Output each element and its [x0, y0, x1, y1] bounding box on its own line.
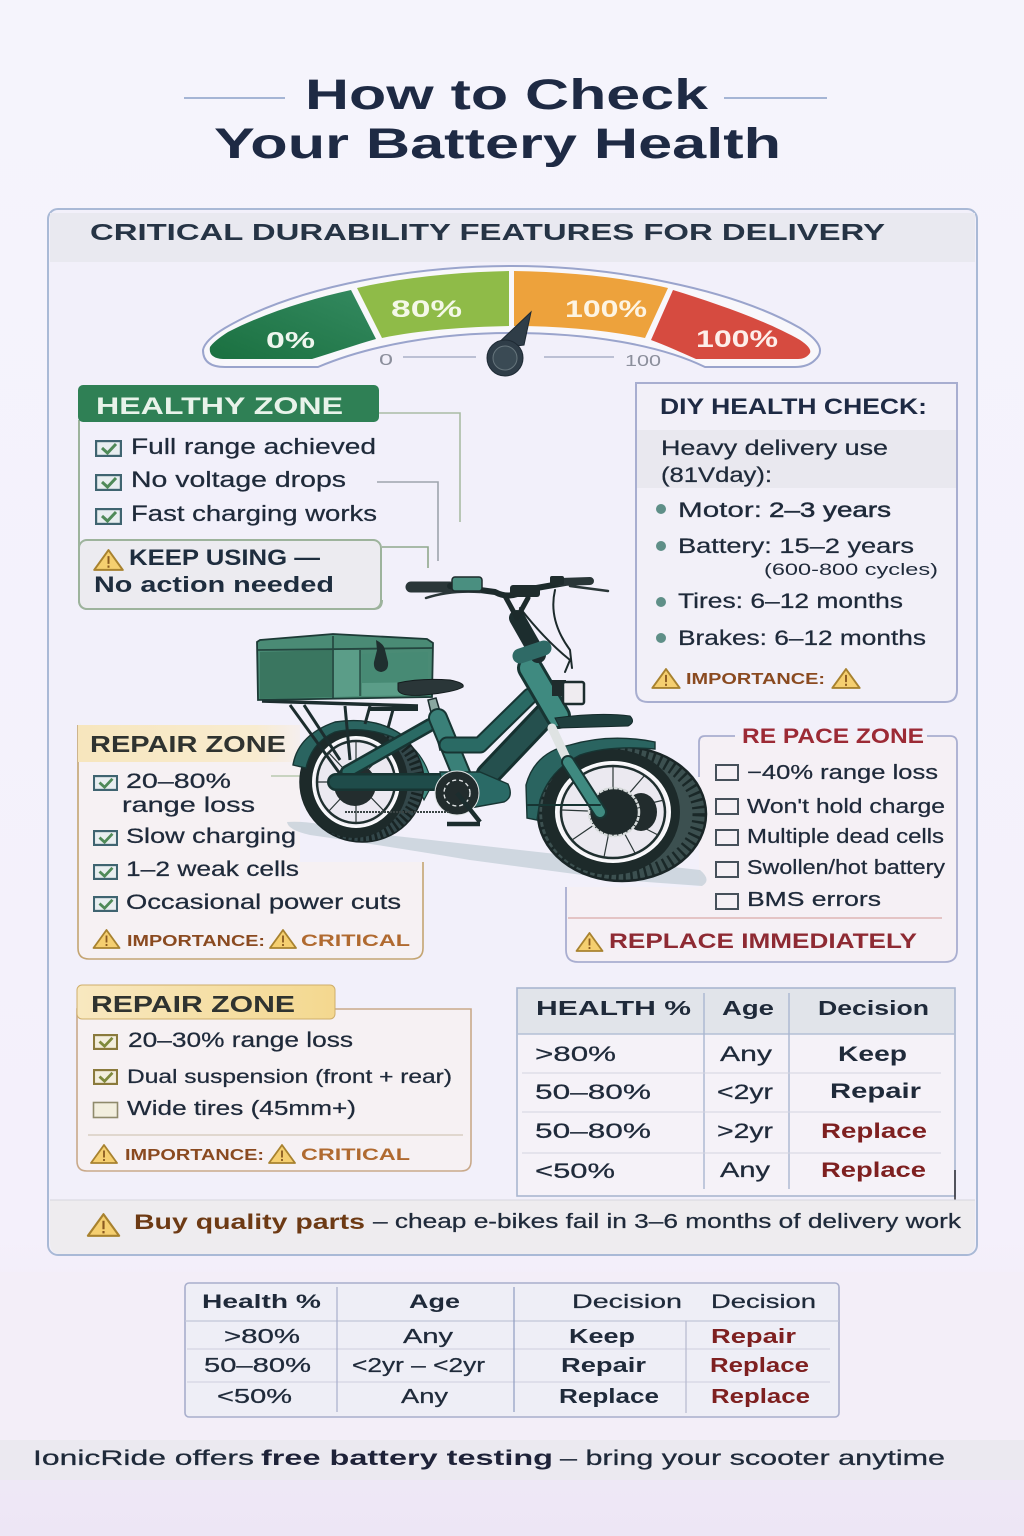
title: How to Check — [305, 71, 708, 119]
keep using callout: KEEP USING — — [129, 545, 320, 570]
gauge labels: 100% — [565, 296, 647, 323]
band behind heavy use text — [637, 430, 956, 488]
healthy zone checklist — [96, 434, 377, 526]
replace checklist: −40% range loss — [747, 762, 938, 784]
delivery box — [257, 634, 433, 700]
lifespan list — [656, 499, 938, 650]
fork — [528, 728, 600, 812]
summary rows: <50% — [217, 1386, 292, 1408]
connector lines — [377, 413, 460, 568]
heavy delivery use text — [661, 437, 888, 487]
lifespan list: Tires: 6–12 months — [678, 590, 903, 613]
footer band: free battery testing — [261, 1447, 553, 1470]
table rows: >80% — [535, 1043, 616, 1066]
repair zone lower header: REPAIR ZONE — [91, 991, 295, 1017]
lower checklist: 20–30% range loss — [128, 1029, 353, 1052]
keep using callout — [79, 540, 381, 609]
gauge segment red — [651, 290, 810, 359]
table header: HEALTH % — [536, 998, 691, 1020]
gauge labels: 100% — [696, 326, 778, 353]
lower importance line: CRITICAL — [301, 1145, 410, 1164]
buy quality callout — [50, 1200, 975, 1254]
replace checklist: Won't hold charge — [747, 796, 945, 818]
box latch — [374, 640, 388, 672]
lower importance line — [91, 1145, 410, 1164]
lifespan list: (600-800 cycles) — [764, 560, 938, 579]
summary rows: Replace — [559, 1386, 659, 1408]
panel: repair zone lower — [77, 985, 471, 1171]
repair checklist: 1–2 weak cells — [126, 858, 299, 881]
replace immediately callout: REPLACE IMMEDIATELY — [609, 930, 917, 953]
table rows: Replace — [821, 1120, 927, 1143]
healthy zone header — [78, 385, 379, 422]
rear fender — [293, 721, 408, 768]
table rows: 50–80% — [535, 1120, 651, 1143]
table rows: 50–80% — [535, 1081, 651, 1104]
gauge needle — [487, 312, 531, 376]
title — [184, 71, 827, 168]
table header: Decision — [818, 998, 929, 1020]
summary header: Health % — [202, 1292, 321, 1313]
panel: main card — [48, 209, 977, 1255]
summary rows: Replace — [711, 1386, 810, 1408]
headlight — [552, 680, 584, 704]
title: Your Battery Health — [214, 120, 781, 168]
table header — [536, 998, 929, 1020]
heading band: critical durability features: CRITICAL DURABILITY FEATURES FOR DELIVERY — [90, 219, 885, 245]
table rows: <50% — [535, 1160, 615, 1183]
lower background band — [0, 1272, 1024, 1440]
healthy zone checklist: Full range achieved — [131, 434, 376, 459]
summary rows: <2yr – <2yr — [352, 1355, 485, 1377]
table rows: <2yr — [717, 1081, 773, 1104]
summary rows: Any — [401, 1386, 448, 1408]
lower importance line: IMPORTANCE: — [125, 1147, 264, 1164]
gauge segment orange — [514, 271, 668, 338]
lower checklist: Wide tires (45mm+) — [127, 1098, 356, 1120]
gauge labels — [266, 296, 778, 353]
gauge scale: 100 — [625, 353, 661, 370]
repair zone lower header — [77, 985, 335, 1019]
illustration: delivery e-bike — [257, 576, 707, 886]
rear wheel — [300, 722, 424, 842]
summary rows: Repair — [561, 1355, 646, 1377]
summary rows: Repair — [711, 1326, 796, 1348]
summary rows: Any — [403, 1326, 453, 1348]
panel: DIY health check — [636, 383, 957, 702]
front fender and rack — [526, 714, 655, 820]
summary header: Decision — [711, 1292, 816, 1313]
replace zone heading: RE PACE ZONE — [742, 725, 924, 748]
gauge segment light green — [357, 271, 509, 338]
importance line: IMPORTANCE: — [686, 671, 825, 688]
gauge scale — [379, 352, 661, 370]
repair checklist: range loss — [122, 794, 255, 817]
heavy delivery use text: Heavy delivery use — [661, 437, 888, 460]
summary rows: >80% — [224, 1326, 300, 1348]
table rows: Repair — [830, 1080, 921, 1103]
replace checklist: Swollen/hot battery — [747, 857, 945, 879]
table rows — [535, 1043, 927, 1183]
panel: healthy zone — [78, 385, 382, 609]
replace checklist: BMS errors — [747, 889, 881, 911]
panel: replace zone — [566, 725, 957, 962]
summary header — [202, 1292, 816, 1313]
connector to rear wheel — [271, 775, 335, 777]
table rows: Replace — [821, 1159, 926, 1182]
table rows: >2yr — [717, 1120, 773, 1143]
panel: repair zone upper — [78, 725, 423, 959]
lower checklist: Dual suspension (front + rear) — [127, 1067, 452, 1088]
heading band: critical durability features — [50, 213, 975, 262]
importance critical line: CRITICAL — [301, 931, 410, 950]
summary header: Age — [409, 1292, 460, 1313]
summary rows: 50–80% — [204, 1355, 311, 1377]
summary rows — [204, 1326, 810, 1408]
table header: Age — [722, 998, 774, 1020]
footer band: IonicRide offers — [33, 1447, 254, 1470]
healthy zone header: HEALTHY ZONE — [96, 393, 343, 420]
repair checklist — [94, 770, 401, 914]
buy quality callout: – cheap e-bikes fail in 3–6 months of delivery work — [373, 1211, 962, 1233]
repair zone header: REPAIR ZONE — [90, 731, 286, 757]
lower checklist — [94, 1029, 452, 1120]
frame — [336, 618, 558, 782]
rear fender inner — [395, 735, 432, 800]
gauge labels: 80% — [391, 296, 462, 323]
ground shadow — [287, 822, 707, 886]
repair zone header — [78, 725, 300, 762]
importance line — [652, 669, 860, 688]
gauge — [203, 266, 820, 376]
importance critical line — [94, 930, 410, 950]
lifespan list: Motor: — [678, 499, 762, 522]
gauge segment green — [210, 290, 376, 359]
seat and post — [398, 679, 463, 750]
importance critical line: IMPORTANCE: — [127, 933, 265, 950]
replace checklist: Multiple dead cells — [747, 826, 944, 848]
table: summary — [185, 1283, 839, 1417]
motor and crank — [345, 771, 510, 824]
gauge labels: 0% — [266, 327, 315, 353]
lifespan list: Battery: 15–2 years — [678, 535, 914, 558]
repair checklist: 20–80% — [126, 770, 231, 793]
footer band — [0, 1440, 1024, 1480]
heavy delivery use text: (81Vday): — [661, 464, 772, 487]
rack and struts — [262, 701, 418, 778]
lifespan list: Brakes: 6–12 months — [678, 627, 926, 650]
summary rows: Keep — [569, 1326, 635, 1348]
front wheel — [538, 747, 706, 881]
handlebar and cables — [411, 576, 608, 672]
table rows: Any — [720, 1159, 771, 1182]
keep using callout: No action needed — [94, 572, 334, 597]
summary header: Decision — [572, 1292, 682, 1313]
gauge scale: 0 — [379, 352, 393, 369]
repair checklist: Slow charging — [126, 825, 296, 848]
DIY heading: DIY HEALTH CHECK: — [660, 394, 927, 419]
replace checklist — [716, 762, 945, 911]
table rows: Any — [720, 1043, 773, 1066]
table rows: Keep — [838, 1043, 907, 1066]
summary rows: Replace — [710, 1355, 809, 1377]
table: health decision — [517, 988, 955, 1200]
repair checklist: Occasional power cuts — [126, 891, 401, 914]
lifespan list: 2–3 years — [769, 499, 891, 522]
footer band: – bring your scooter anytime — [560, 1447, 945, 1470]
healthy zone checklist: No voltage drops — [131, 467, 346, 492]
buy quality callout: Buy quality parts — [134, 1211, 365, 1234]
healthy zone checklist: Fast charging works — [131, 501, 377, 526]
